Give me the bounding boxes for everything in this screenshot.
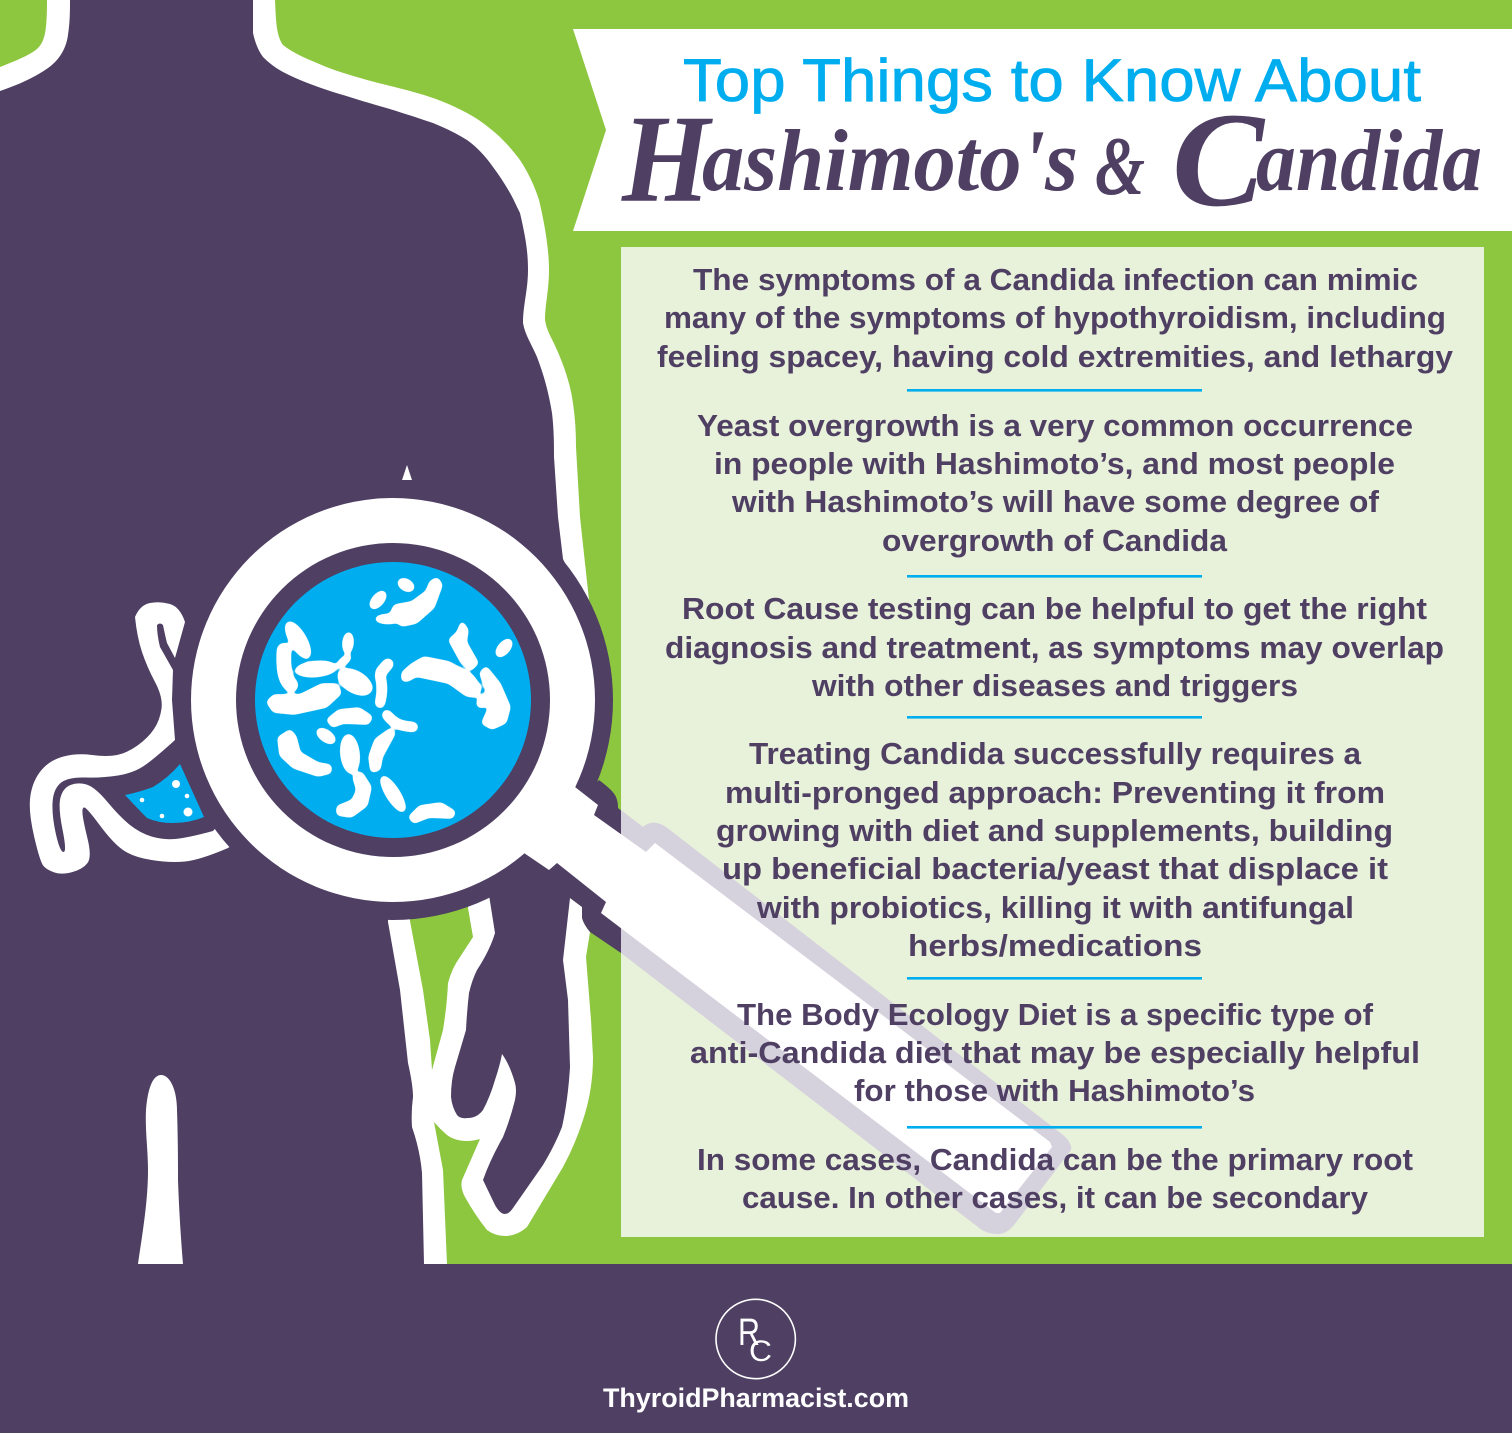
logo: R xyxy=(738,1312,760,1354)
fact 3: Root Cause testing can be helpful to get the right xyxy=(682,592,1427,626)
fact 1: feeling spacey, having cold extremities, and lethargy xyxy=(657,340,1453,374)
fact 1: many of the symptoms of hypothyroidism, including xyxy=(664,301,1446,335)
stomach fluid xyxy=(125,764,204,823)
fact 2: with Hashimoto’s will have some degree of xyxy=(731,485,1380,519)
title line two: C xyxy=(1172,86,1266,235)
fact 4: up beneficial bacteria/yeast that displace it xyxy=(722,852,1388,886)
stomach xyxy=(30,602,240,874)
fact 6 xyxy=(697,1143,1413,1215)
fact 4: herbs/medications xyxy=(908,929,1202,963)
fact 1: The symptoms of a Candida infection can mimic xyxy=(693,263,1418,297)
fact 6: cause. In other cases, it can be secondary xyxy=(742,1181,1368,1215)
fact 5 xyxy=(690,998,1420,1108)
body outline xyxy=(0,0,593,1264)
title line two: H xyxy=(621,91,713,229)
fact 3: diagnosis and treatment, as symptoms may overlap xyxy=(665,631,1444,665)
stomach bubbles xyxy=(140,780,192,818)
fact 2: overgrowth of Candida xyxy=(882,524,1228,558)
footer band xyxy=(0,1264,1512,1433)
fact 4: multi-pronged approach: Preventing it from xyxy=(725,776,1385,810)
fact 5: The Body Ecology Diet is a specific type of xyxy=(737,998,1374,1032)
navel xyxy=(402,465,412,480)
fact 1 xyxy=(657,263,1453,374)
leg gap xyxy=(138,1075,183,1264)
handle faded outline over panel xyxy=(621,810,1071,1234)
fact 2: in people with Hashimoto’s, and most people xyxy=(714,447,1395,481)
fact 5: for those with Hashimoto’s xyxy=(854,1074,1255,1108)
logo xyxy=(716,1299,795,1379)
title banner xyxy=(573,29,1512,235)
fact list xyxy=(657,263,1453,1215)
fact 4 xyxy=(716,737,1393,963)
fact 2 xyxy=(697,409,1413,558)
candida cells xyxy=(268,575,516,822)
title line two: ashimoto's xyxy=(702,113,1078,210)
fact 3 xyxy=(665,592,1444,703)
fact 5: anti-Candida diet that may be especially helpful xyxy=(690,1036,1420,1070)
green gap between torso and arm xyxy=(410,895,473,1070)
handle dark outline xyxy=(500,780,640,968)
torso silhouette xyxy=(0,0,595,1264)
text panel xyxy=(621,247,1484,1237)
body illustration xyxy=(0,0,595,1264)
fact 2: Yeast overgrowth is a very common occurrence xyxy=(697,409,1413,443)
title line two: & xyxy=(1095,120,1145,213)
fact 4: with probiotics, killing it with antifungal xyxy=(756,891,1354,925)
title line two: andida xyxy=(1256,113,1482,210)
title line two xyxy=(621,86,1482,235)
stomach interior xyxy=(52,670,240,852)
fact 3: with other diseases and triggers xyxy=(811,669,1298,703)
stomach outline xyxy=(30,602,240,874)
magnifier handle xyxy=(524,787,1052,1213)
fact 4: Treating Candida successfully requires a xyxy=(749,737,1362,771)
magnifier lens xyxy=(173,480,613,920)
fact 6: In some cases, Candida can be the primary root xyxy=(697,1143,1413,1177)
logo: C xyxy=(749,1335,772,1368)
fact 4: growing with diet and supplements, building xyxy=(716,814,1393,848)
stomach upper channel xyxy=(157,624,200,680)
website: ThyroidPharmacist.com xyxy=(603,1383,909,1413)
title line one: Top Things to Know About xyxy=(683,47,1421,114)
